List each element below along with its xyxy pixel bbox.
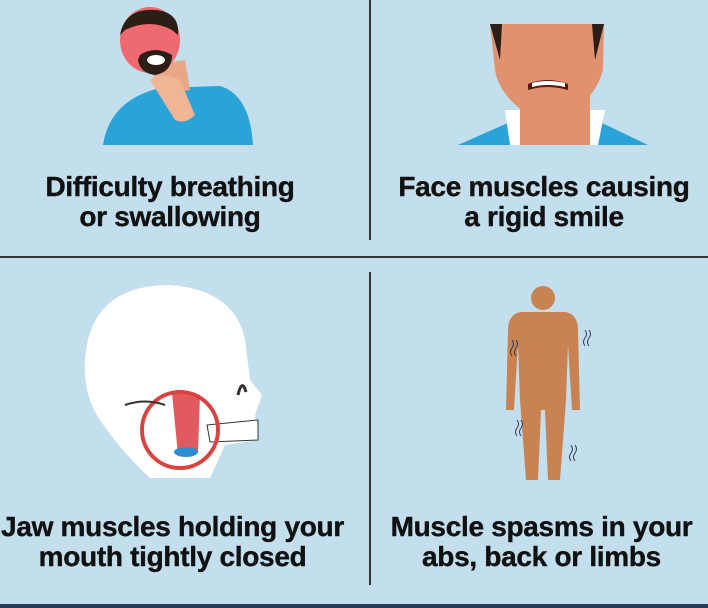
- heading: jaw: [1, 511, 344, 572]
- heading: spasms: [391, 511, 692, 572]
- heading: spasms: abs, back or limbs: [422, 541, 661, 572]
- heading: jaw: Jaw muscles holding your: [1, 511, 344, 542]
- heading: jaw: mouth tightly closed: [39, 541, 306, 572]
- heading: breathing: or swallowing: [79, 201, 261, 232]
- heading: rigid smile: a rigid smile: [464, 201, 624, 232]
- heading: rigid smile: [398, 171, 690, 232]
- heading: spasms: Muscle spasms in your: [391, 511, 692, 542]
- heading: breathing: [45, 171, 295, 232]
- heading: breathing: Difficulty breathing: [45, 171, 295, 202]
- heading: rigid smile: Face muscles causing: [398, 171, 690, 202]
